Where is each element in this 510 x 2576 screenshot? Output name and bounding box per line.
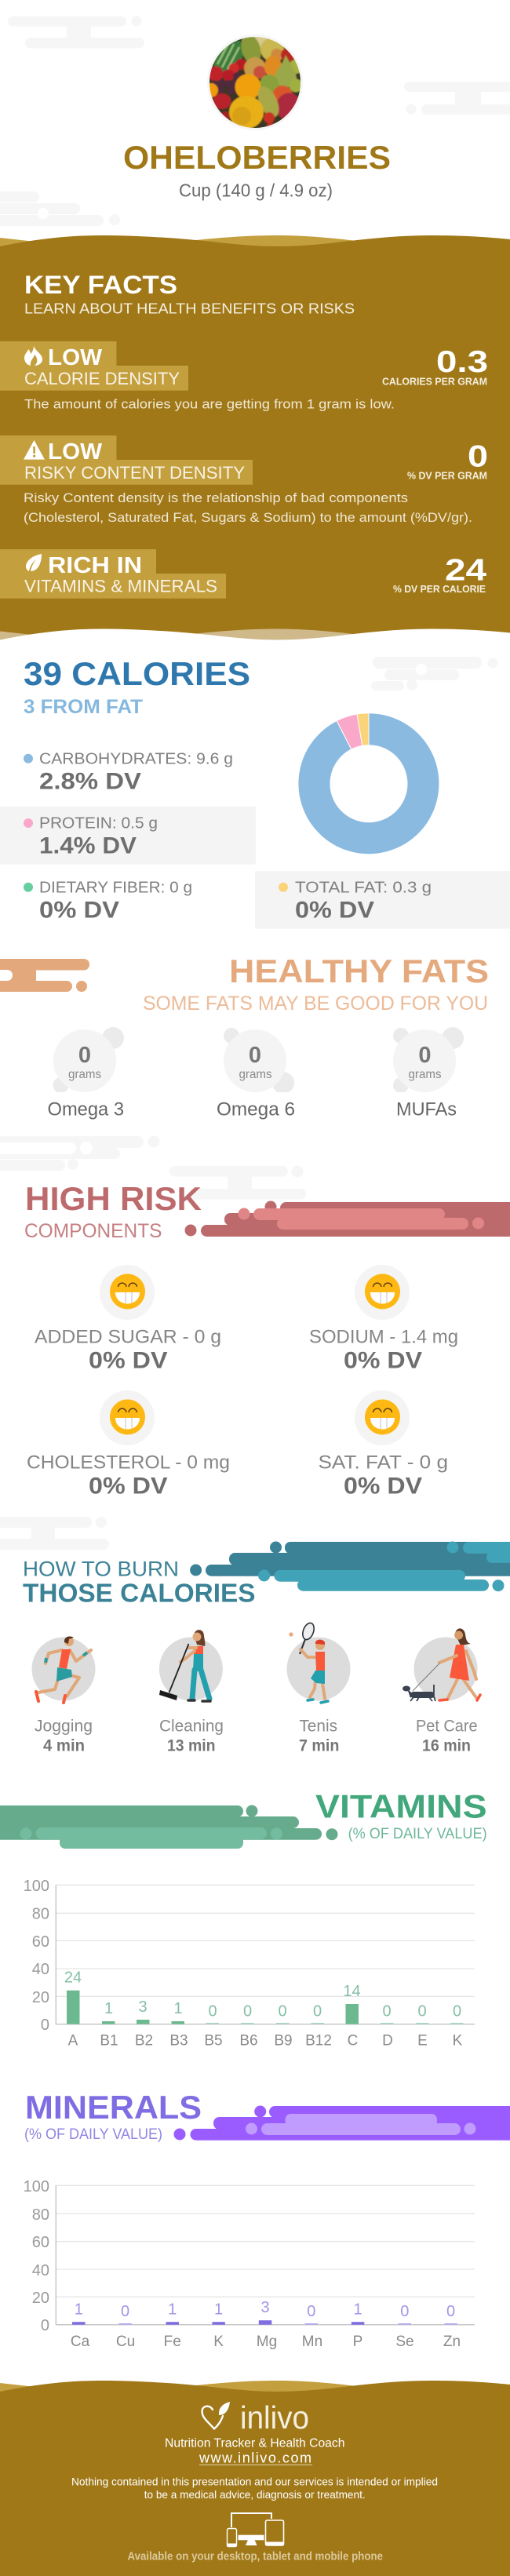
fact: calorie density [0,341,488,412]
activity: pet care [403,1628,480,1755]
activity: jogging: 4 min [43,1737,85,1755]
bar chart: vitamins: 0 [208,2002,217,2020]
bar chart: vitamins: 80 [32,1906,49,1923]
stat: omega 6: Omega 6 [217,1099,295,1120]
item: sodium: SODIUM - 1.4 mg [309,1327,458,1348]
activity: tennis: 7 min [299,1737,339,1755]
row: carbohydrates: CARBOHYDRATES: 9.6 g [39,750,233,767]
rating: RICH IN [48,553,142,578]
heading: calories: 39 CALORIES [24,655,250,692]
stat: MUFAs [393,1027,464,1120]
bar chart: vitamins: B9 [274,2033,293,2050]
activity: jogging [31,1636,96,1755]
heading: key facts: KEY FACTS [24,271,177,299]
bar chart: minerals: 100 [24,2178,49,2195]
stat: omega 3: Omega 3 [47,1099,124,1120]
subheading: (% OF DAILY VALUE) [348,1826,487,1842]
fact: rich in vitamins and minerals [0,549,486,599]
bar chart: minerals: K [213,2334,224,2350]
bar chart: minerals: 0 [121,2303,129,2320]
logo: wordmark: inlivo [240,2399,309,2436]
unit: CALORIES PER GRAM [382,375,487,388]
bar chart: vitamins: 0 [243,2002,252,2020]
bar chart: vitamins: E [417,2033,428,2050]
bar chart: minerals: 0 [307,2303,315,2320]
stat: MUFAs: grams [408,1068,441,1081]
icon: woman walking a dog [403,1628,480,1701]
top wave [0,235,510,251]
food photo: assorted fruit [207,35,303,130]
description: The amount of calories you are getting from 1 gram is low. [24,397,395,412]
activity: tennis: Tenis [299,1718,337,1736]
description: (Cholesterol, Saturated Fat, Sugars & Sodium) to the amount (%DV/gr). [24,510,472,525]
icon: grinning face [365,1400,400,1434]
value: 0.3 [436,345,488,379]
bar chart: vitamins: K [453,2033,463,2050]
unit: % DV PER CALORIE [393,583,486,595]
stat: omega 3: 0 [78,1043,91,1068]
stat: omega 6: 0 [249,1043,261,1068]
item: added sugar [35,1265,221,1373]
bar chart: minerals: Cu [116,2334,135,2350]
bar chart: minerals: 0 [41,2317,49,2334]
disclaimer: Nothing contained in this presentation and our services is intended or implied [71,2475,438,2487]
bar chart: vitamins: 40 [32,1961,49,1978]
bottom wave [0,629,510,645]
rating: LOW [48,345,103,370]
bar chart: vitamins: B3 [169,2033,188,2050]
icon: flame [24,345,42,366]
icon: grinning face [110,1400,145,1434]
rating: LOW [48,439,103,465]
bar chart: minerals: Zn [443,2334,461,2350]
row: protein: 1.4% DV [39,833,137,858]
tagline: Nutrition Tracker & Health Coach [165,2436,345,2450]
unit: % DV PER GRAM [407,469,487,481]
row: dietary fiber: 0% DV [39,897,119,923]
heading: those calories: THOSE CALORIES [23,1579,256,1608]
subheading: (% OF DAILY VALUE) [24,2126,162,2143]
bar chart: vitamins: B5 [204,2033,223,2050]
row: carbohydrates [24,750,233,795]
bar chart: minerals: 20 [32,2290,49,2307]
description [24,490,472,525]
row: total fat: 0% DV [295,897,374,923]
heading: vitamins: VITAMINS [315,1788,487,1825]
decoration: clouds [0,1136,306,1199]
serving size: Cup (140 g / 4.9 oz) [179,180,333,201]
bar chart: vitamins: B1 [100,2033,118,2050]
bar chart: minerals: 1 [75,2301,83,2318]
icon: tennis player [289,1621,328,1703]
bar chart: minerals: Fe [164,2334,181,2350]
bar chart: minerals: 0 [446,2303,455,2320]
decoration: teal bars [190,1541,510,1591]
bar chart: vitamins: 20 [32,1989,49,2006]
stat: omega 3: grams [68,1068,101,1081]
bar chart: minerals: 1 [353,2301,362,2318]
website: www.inlivo.com [199,2450,311,2465]
disclaimer [71,2475,438,2501]
fact: risky content density [0,435,488,525]
activity: cleaning [159,1630,224,1755]
bar chart: minerals: 0 [400,2303,409,2320]
bar chart: vitamins: A [68,2033,78,2050]
stat: omega 3 [47,1027,124,1120]
bar chart: vitamins: D [382,2033,393,2050]
item: sodium: 0% DV [344,1347,422,1373]
heading: how to burn: HOW TO BURN [23,1557,179,1580]
panel: healthy fats [0,953,489,1120]
panel: high risk [0,1136,510,1499]
panel: minerals [24,2089,510,2350]
bar chart: vitamins: 24 [64,1969,82,1987]
item: cholesterol [27,1390,230,1499]
bar chart: minerals: 3 [260,2299,270,2316]
stat: omega 6: grams [239,1068,271,1081]
decoration: purple bars [174,2106,510,2141]
bar chart: minerals: Ca [71,2334,90,2350]
bar chart: vitamins: B6 [239,2033,258,2050]
availability note: Available on your desktop, tablet and mobile phone [127,2550,383,2563]
decoration: orange bars [0,959,89,992]
heading: high risk: HIGH RISK [25,1180,202,1217]
subheading: SOME FATS MAY BE GOOD FOR YOU [143,993,488,1015]
value: 24 [445,553,486,587]
icon: jogger [36,1636,91,1703]
activity: cleaning: 13 min [167,1737,215,1755]
bar chart: minerals: Mg [257,2334,277,2350]
item: saturated fat: 0% DV [344,1473,422,1499]
subheading: components: COMPONENTS [24,1220,162,1242]
item: saturated fat [319,1390,448,1499]
activity: pet care: 16 min [422,1737,471,1755]
item: cholesterol: CHOLESTEROL - 0 mg [27,1452,230,1474]
bar chart: minerals: P [353,2334,362,2350]
activity: jogging: Jogging [35,1718,93,1736]
heading: healthy fats: HEALTHY FATS [229,953,489,989]
icon: person sweeping [159,1630,210,1701]
bar chart: vitamins: 0 [417,2002,427,2020]
bar chart: vitamins: B12 [305,2033,332,2050]
item: sodium [309,1265,458,1373]
bar chart: vitamins: 1 [104,2000,113,2017]
panel: how to burn calories [0,1517,510,1755]
activity: cleaning: Cleaning [159,1718,224,1736]
bar chart: vitamins: 0 [278,2002,287,2020]
panel: calories [0,655,510,929]
panel: footer [0,2381,510,2576]
bar chart: vitamins: 0 [313,2002,322,2020]
subheading: from fat: 3 FROM FAT [24,696,143,718]
bar chart: vitamins: 60 [32,1933,49,1951]
icon: desktop, tablet and phone [227,2513,284,2547]
logo: inlivo heart [202,2402,230,2429]
label: VITAMINS & MINERALS [24,576,217,596]
decoration: cloud [0,1517,109,1550]
icon: leaf [26,554,42,571]
bar chart: vitamins: 3 [138,1998,148,2016]
decoration: green bars [0,1805,337,1849]
bar chart: vitamins: 100 [24,1878,49,1895]
bar chart: minerals: Mn [302,2334,322,2350]
heading: minerals: MINERALS [25,2089,202,2126]
row: protein [0,807,256,865]
label: RISKY CONTENT DENSITY [24,463,245,483]
item: cholesterol: 0% DV [89,1473,168,1499]
row: carbohydrates: 2.8% DV [39,769,141,795]
row: total fat [255,871,510,929]
row: dietary fiber: DIETARY FIBER: 0 g [39,880,192,897]
icon: grinning face [110,1274,145,1309]
activity: tennis [287,1621,350,1755]
bar chart: vitamins: B2 [135,2033,153,2050]
decoration: header clouds [0,16,510,226]
bar chart: vitamins: 14 [343,1983,361,2000]
title: OHELOBERRIES [123,139,391,176]
bar chart: minerals: 80 [32,2206,49,2224]
label: CALORIE DENSITY [24,369,180,388]
value: 0 [468,439,488,473]
donut chart [298,713,439,854]
subheading: LEARN ABOUT HEALTH BENEFITS OR RISKS [24,301,355,317]
bar chart: minerals: 60 [32,2234,49,2251]
footer wave [0,2381,510,2396]
bar chart: minerals: 1 [168,2301,177,2318]
row: total fat: TOTAL FAT: 0.3 g [295,880,432,897]
row: dietary fiber [24,880,192,923]
bar chart: vitamins: 0 [382,2002,392,2020]
disclaimer: to be a medical advice, diagnosis or treatment. [144,2488,366,2501]
item: added sugar: 0% DV [89,1347,168,1373]
panel: key facts [0,235,510,645]
decoration: red bars [185,1201,510,1237]
icon: grinning face [365,1274,400,1309]
row: protein: PROTEIN: 0.5 g [39,815,158,833]
bar chart: vitamins: C [348,2033,358,2050]
bar chart: minerals: 40 [32,2262,49,2279]
bar chart: vitamins [24,1878,475,2050]
stat: MUFAs: 0 [418,1043,432,1068]
bar chart: minerals [24,2178,475,2350]
panel: vitamins [0,1788,487,2050]
item: saturated fat: SAT. FAT - 0 g [319,1452,448,1474]
bar chart: vitamins: 1 [173,2000,183,2017]
stat: omega 6 [217,1028,295,1120]
bar chart: vitamins: 0 [453,2002,461,2020]
bar chart: minerals: Se [395,2334,414,2350]
decoration: cloud [371,657,497,690]
activity: pet care: Pet Care [416,1718,478,1736]
stat: MUFAs: MUFAs [396,1099,457,1120]
icon: warning triangle [24,440,45,460]
item: added sugar: ADDED SUGAR - 0 g [35,1327,221,1348]
bar chart: minerals: 1 [214,2301,223,2318]
bar chart: vitamins: 0 [41,2017,49,2034]
description: Risky Content density is the relationship of bad components [24,490,408,505]
